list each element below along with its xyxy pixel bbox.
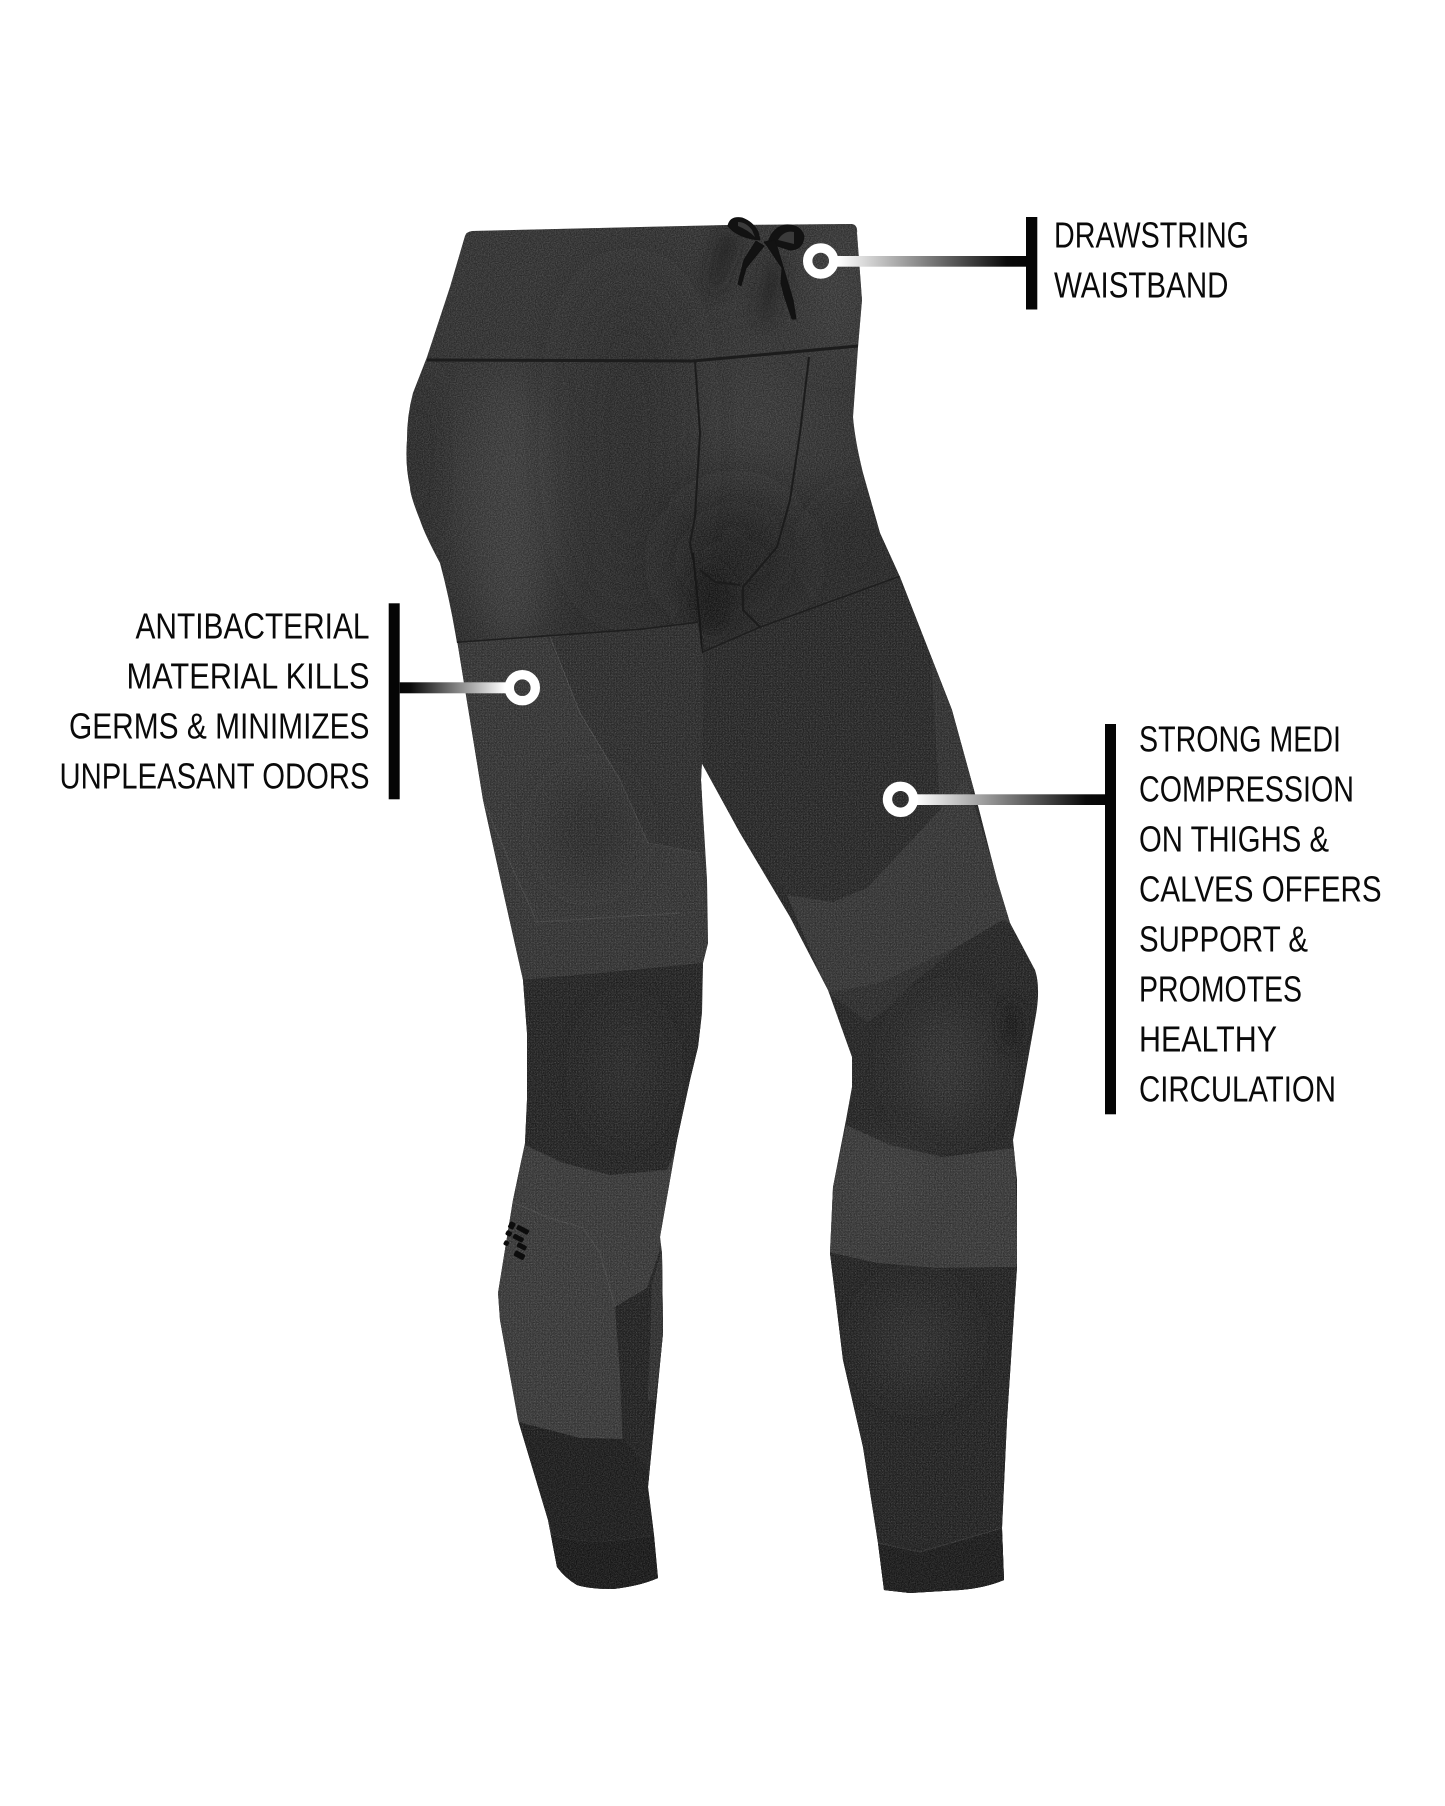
lower hem seam [457,577,900,653]
label text: CIRCULATION [1139,1069,1336,1110]
label text: COMPRESSION [1139,769,1354,810]
callout: strong medi compression [888,719,1382,1114]
right leg [702,576,1038,1593]
connector line [400,682,508,693]
label text: MATERIAL KILLS [126,655,370,696]
label text: GERMS & MINIMIZES [69,705,370,746]
marker ring [808,248,834,274]
connector line [836,256,1026,267]
label text: SUPPORT & [1139,919,1308,960]
infographic canvas [62,217,1380,1593]
vertical bar [389,603,400,799]
label text: UNPLEASANT ODORS [60,756,370,797]
waist seam [427,346,858,361]
label text: DRAWSTRING [1054,214,1249,255]
callout: antibacterial material [60,603,535,799]
vertical bar [1105,724,1116,1114]
marker ring [509,675,535,701]
drawstring shadows [708,232,782,322]
label text: CALVES OFFERS [1139,869,1382,910]
marker ring [888,786,914,812]
label text [1139,719,1382,1110]
label text: STRONG MEDI [1139,719,1341,760]
label text: WAISTBAND [1054,265,1228,306]
label text [1054,214,1249,306]
crotch edge [693,553,702,653]
label text [60,605,370,797]
callout: drawstring waistband [808,214,1249,310]
vertical bar [1026,217,1037,310]
product: compression tights [400,215,1050,1600]
label text: ANTIBACTERIAL [136,605,370,646]
drawstring bow [728,218,804,319]
logo mark on calf [503,1221,530,1260]
shorts [400,215,910,665]
connector line [915,794,1105,805]
label text: PROMOTES [1139,969,1302,1010]
label text: ON THIGHS & [1139,819,1329,860]
gusset seams [690,357,809,627]
left leg [450,610,720,1600]
label text: HEALTHY [1139,1019,1277,1060]
